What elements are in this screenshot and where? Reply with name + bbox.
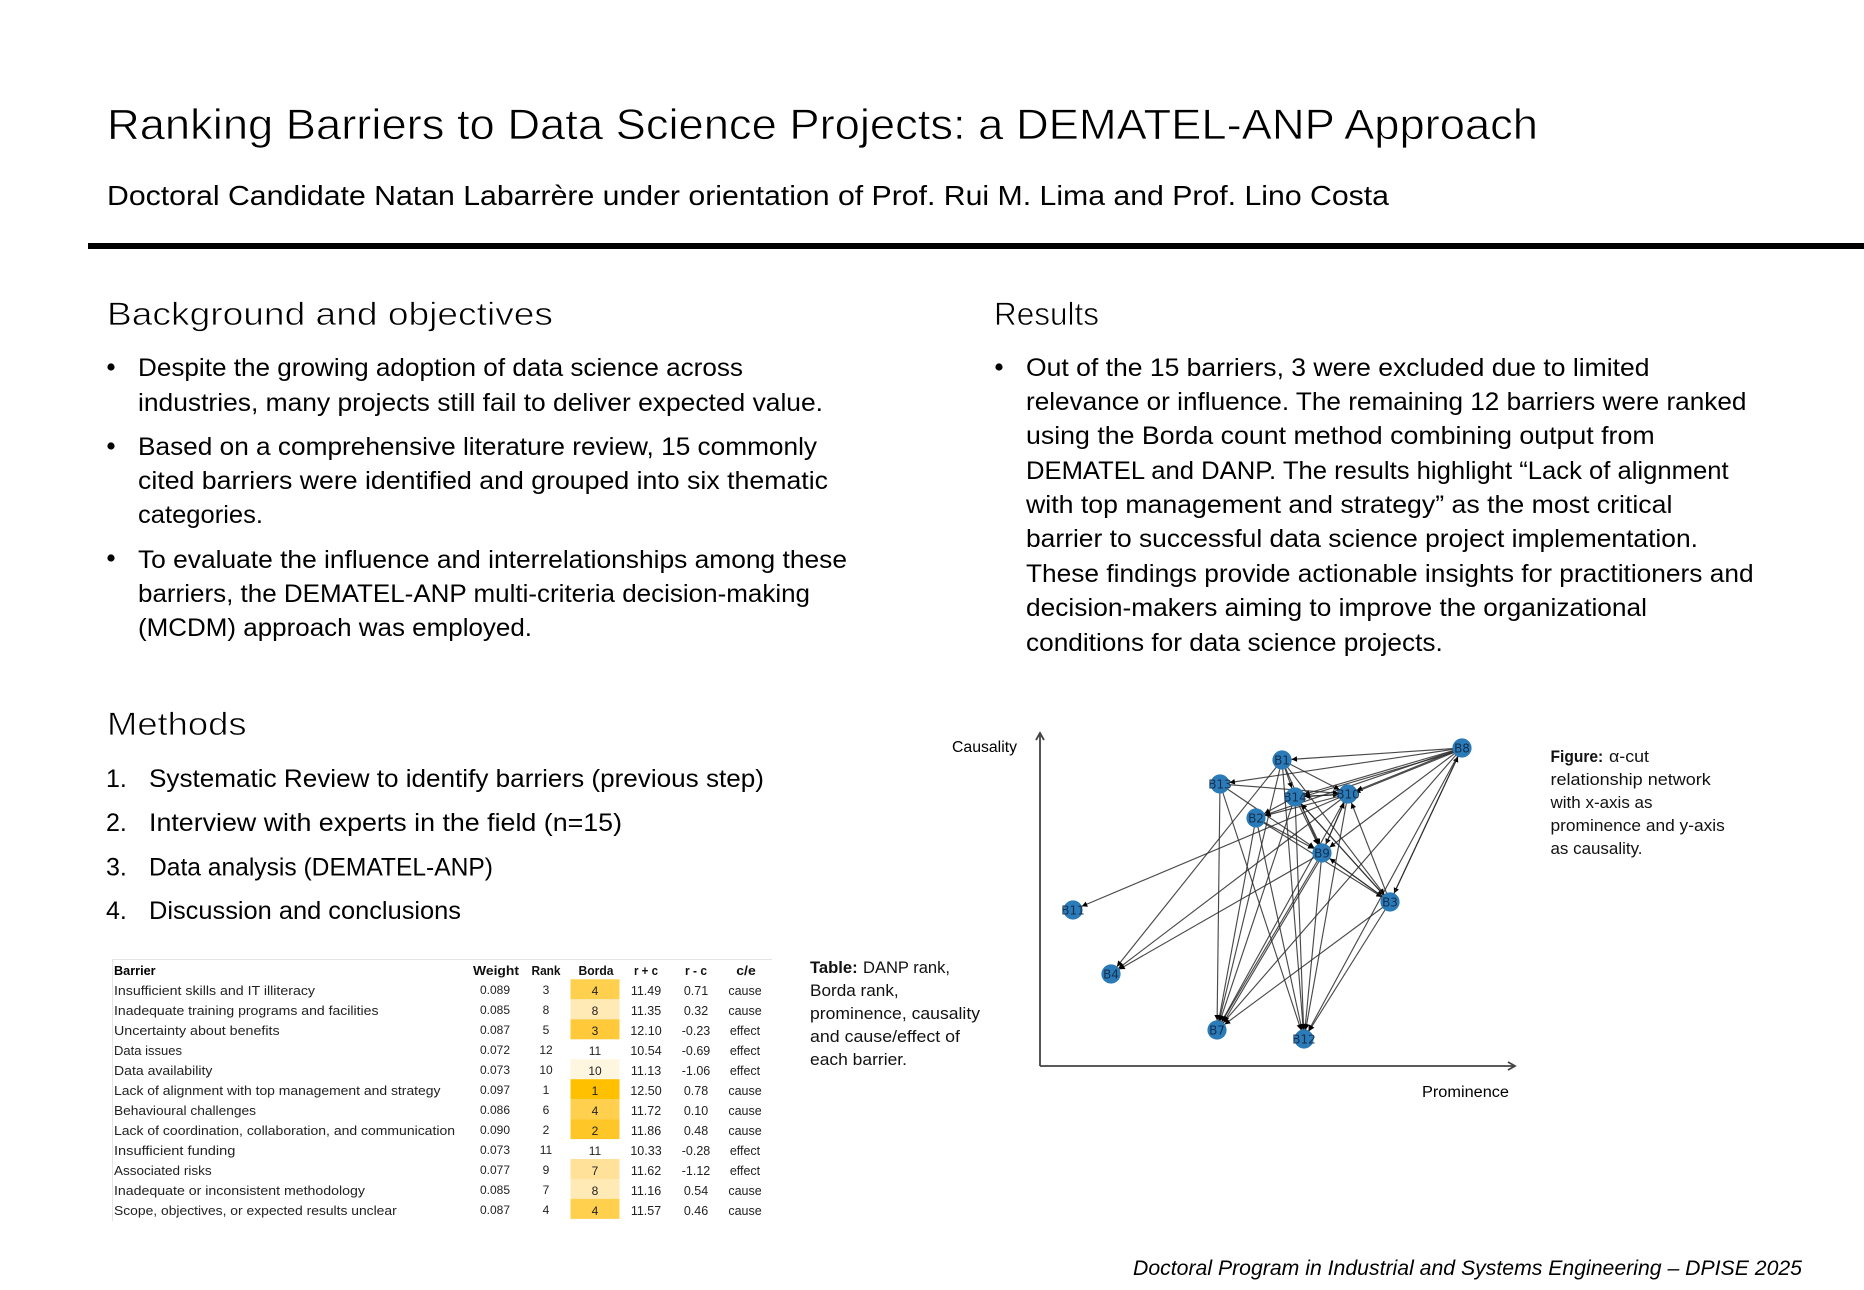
row 6: 1 xyxy=(592,1084,599,1098)
row 5: 10 xyxy=(539,1063,553,1077)
row 12: 4 xyxy=(543,1203,550,1217)
row 2: 0.32 xyxy=(684,1004,708,1018)
bullet text block 1: industries, many projects still fail to deliver expected value. xyxy=(138,389,823,417)
node B8 xyxy=(1452,738,1472,758)
figure caption: α-cut xyxy=(1609,747,1649,766)
panel: results xyxy=(994,296,1754,657)
row 11: cause xyxy=(728,1184,762,1198)
table: barrier ranking xyxy=(112,959,772,1221)
node B12: B12 xyxy=(1292,1032,1316,1046)
row 6: 0.78 xyxy=(684,1084,708,1098)
table: borda heat cells xyxy=(570,979,620,1219)
table header row xyxy=(114,964,756,978)
table header row: Rank xyxy=(532,964,561,978)
row 3: 12.10 xyxy=(630,1024,662,1038)
row 8 xyxy=(114,1123,762,1138)
bullet text block 3: (MCDM) approach was employed. xyxy=(138,614,532,642)
figure caption: Figure: xyxy=(1550,747,1603,766)
row 4: -0.69 xyxy=(682,1044,710,1058)
method step 1: 1. xyxy=(106,765,127,793)
node B2 xyxy=(1246,808,1266,828)
node B4 xyxy=(1101,964,1121,984)
row 9: 10.33 xyxy=(630,1144,662,1158)
row 11: 0.54 xyxy=(684,1184,708,1198)
row 7: cause xyxy=(728,1104,762,1118)
node B3 xyxy=(1380,892,1400,912)
row 10: effect xyxy=(730,1164,761,1178)
row 4: 11 xyxy=(589,1044,602,1058)
node B10: B10 xyxy=(1336,788,1360,802)
table caption: DANP rank, xyxy=(863,958,950,977)
row 1: cause xyxy=(728,984,762,998)
table header row: Weight xyxy=(473,964,520,978)
bullet text block 2: categories. xyxy=(138,501,263,529)
row 7: 0.10 xyxy=(684,1104,708,1118)
bullet text block 3 xyxy=(107,546,847,642)
row 2: 8 xyxy=(543,1003,550,1017)
row 6 xyxy=(114,1083,762,1098)
node B14: B14 xyxy=(1283,790,1307,804)
heading: background and objectives: Background and objectives xyxy=(107,296,553,332)
row 3: Uncertainty about benefits xyxy=(114,1024,280,1038)
results text block: DEMATEL and DANP. The results highlight “Lack of alignment xyxy=(1026,457,1729,485)
row 5: Data availability xyxy=(114,1064,213,1078)
method step 2: 2. xyxy=(106,809,127,837)
node B1: B1 xyxy=(1274,754,1290,768)
row 7 xyxy=(114,1103,762,1118)
row 10 xyxy=(114,1163,761,1178)
table caption: and cause/effect of xyxy=(810,1027,960,1046)
row 5: effect xyxy=(730,1064,761,1078)
node B4: B4 xyxy=(1103,968,1119,982)
bullet text block 2: Based on a comprehensive literature review, 15 commonly xyxy=(138,433,818,461)
row 8: cause xyxy=(728,1124,762,1138)
row 8: 11.86 xyxy=(631,1124,661,1138)
bullet text block 3: barriers, the DEMATEL-ANP multi-criteria decision-making xyxy=(138,580,810,608)
table header row: c/e xyxy=(736,964,756,978)
method step 3: Data analysis (DEMATEL-ANP) xyxy=(149,854,493,882)
header rule xyxy=(88,243,1864,249)
figure caption: prominence and y-axis xyxy=(1550,816,1725,835)
panel: background and objectives xyxy=(107,296,847,642)
node B9: B9 xyxy=(1314,846,1330,860)
figure caption xyxy=(1549,747,1725,858)
row 4: 12 xyxy=(539,1043,553,1057)
row 8: 2 xyxy=(592,1124,599,1138)
row 4: effect xyxy=(730,1044,761,1058)
row 7: 4 xyxy=(592,1104,599,1118)
network edges xyxy=(1073,748,1462,1039)
row 12: cause xyxy=(728,1204,762,1218)
row 8: 0.090 xyxy=(480,1123,510,1137)
node B2: B2 xyxy=(1248,812,1264,826)
row 11: 0.085 xyxy=(480,1183,510,1197)
row 1 xyxy=(114,983,762,998)
table caption xyxy=(810,958,981,1069)
row 12 xyxy=(114,1203,762,1218)
row 3: -0.23 xyxy=(682,1024,710,1038)
node B9 xyxy=(1312,843,1332,863)
row 2: 11.35 xyxy=(631,1004,661,1018)
method step 1: Systematic Review to identify barriers (previous step) xyxy=(149,765,764,793)
node B8: B8 xyxy=(1454,742,1470,756)
bullet text block 2: cited barriers were identified and grouped into six thematic xyxy=(138,467,828,495)
table caption: Table: xyxy=(810,958,858,977)
row 12: 4 xyxy=(592,1204,599,1218)
row 11: 8 xyxy=(592,1184,599,1198)
row 4: 0.072 xyxy=(480,1043,510,1057)
y axis with arrow xyxy=(1036,733,1044,1066)
bullet text block 1: Despite the growing adoption of data science across xyxy=(138,354,743,382)
row 2: 8 xyxy=(592,1004,599,1018)
results text block: Out of the 15 barriers, 3 were excluded due to limited xyxy=(1026,354,1650,382)
row 1: Insufficient skills and IT illiteracy xyxy=(114,984,316,998)
row 1: 4 xyxy=(592,984,599,998)
row 8: Lack of coordination, collaboration, and communication xyxy=(114,1124,455,1138)
subtitle: authors: Doctoral Candidate Natan Labarrère under orientation of Prof. Rui M. Lima and Prof. Lino Costa xyxy=(107,180,1389,211)
node B13: B13 xyxy=(1208,778,1232,792)
figure caption: relationship network xyxy=(1550,770,1712,789)
row 2: Inadequate training programs and facilities xyxy=(114,1004,378,1018)
row 7: 11.72 xyxy=(631,1104,661,1118)
row 5: 11.13 xyxy=(631,1064,661,1078)
row 12: 11.57 xyxy=(631,1204,661,1218)
row 4: 10.54 xyxy=(630,1044,662,1058)
table caption: each barrier. xyxy=(810,1050,907,1069)
row 2 xyxy=(114,1003,762,1018)
table header row: r + c xyxy=(634,964,658,978)
row 5: 10 xyxy=(588,1064,602,1078)
row 10: 0.077 xyxy=(480,1163,510,1177)
row 3: 3 xyxy=(592,1024,599,1038)
row 9: -0.28 xyxy=(682,1144,710,1158)
panel: methods xyxy=(106,706,764,925)
bullet text block 3: To evaluate the influence and interrelationships among these xyxy=(138,546,847,574)
row 3: 0.087 xyxy=(480,1023,510,1037)
results text block: These findings provide actionable insights for practitioners and xyxy=(1026,560,1754,588)
node B3: B3 xyxy=(1382,896,1398,910)
results text block: decision-makers aiming to improve the organizational xyxy=(1026,594,1647,622)
node B1 xyxy=(1272,750,1292,770)
row 11: 11.16 xyxy=(631,1184,661,1198)
row 9: effect xyxy=(730,1144,761,1158)
row 10: -1.12 xyxy=(682,1164,710,1178)
row 12: 0.46 xyxy=(684,1204,708,1218)
method step 2: Interview with experts in the field (n=15) xyxy=(149,809,622,837)
row 9: 11 xyxy=(589,1144,602,1158)
row 9: 11 xyxy=(540,1143,553,1157)
row 11: Inadequate or inconsistent methodology xyxy=(114,1184,366,1198)
results text block: conditions for data science projects. xyxy=(1026,629,1443,657)
row 3: effect xyxy=(730,1024,761,1038)
method step 4: Discussion and conclusions xyxy=(149,897,461,925)
row 7: 6 xyxy=(543,1103,550,1117)
bullet text block 2 xyxy=(107,433,828,529)
y axis label: Causality xyxy=(952,739,1017,756)
table caption: prominence, causality xyxy=(810,1004,981,1023)
row 6: cause xyxy=(728,1084,762,1098)
results text block: with top management and strategy” as the most critical xyxy=(1025,491,1672,519)
method step 3: 3. xyxy=(106,854,127,882)
row 4 xyxy=(114,1043,761,1058)
row 3: 5 xyxy=(543,1023,550,1037)
row 10: 11.62 xyxy=(631,1164,661,1178)
row 5 xyxy=(114,1063,761,1078)
row 1: 0.71 xyxy=(684,984,708,998)
table header row: Borda xyxy=(578,964,614,978)
row 7: Behavioural challenges xyxy=(114,1104,256,1118)
results text block xyxy=(995,354,1754,657)
row 6: 1 xyxy=(543,1083,550,1097)
chart: relationship network xyxy=(952,733,1515,1101)
row 2: cause xyxy=(728,1004,762,1018)
row 8: 2 xyxy=(543,1123,550,1137)
results text block: relevance or influence. The remaining 12 barriers were ranked xyxy=(1026,388,1746,416)
row 7: 0.086 xyxy=(480,1103,510,1117)
row 8: 0.48 xyxy=(684,1124,708,1138)
row 1: 0.089 xyxy=(480,983,510,997)
title: Ranking Barriers to Data Science Projects: a DEMATEL-ANP Approach xyxy=(107,101,1538,149)
row 1: 11.49 xyxy=(631,984,661,998)
heading: results: Results xyxy=(994,296,1099,332)
row 11: 7 xyxy=(543,1183,550,1197)
results text block: using the Borda count method combining output from xyxy=(1026,422,1655,450)
row 10: 7 xyxy=(592,1164,599,1178)
figure caption: with x-axis as xyxy=(1549,793,1652,812)
footer: Doctoral Program in Industrial and Systems Engineering – DPISE 2025 xyxy=(1133,1256,1803,1280)
row 11 xyxy=(114,1183,762,1198)
row 5: 0.073 xyxy=(480,1063,510,1077)
node B11: B11 xyxy=(1061,904,1085,918)
row 10: 9 xyxy=(543,1163,550,1177)
row 6: 0.097 xyxy=(480,1083,510,1097)
row 5: -1.06 xyxy=(682,1064,710,1078)
method step 4: 4. xyxy=(106,897,127,925)
row 2: 0.085 xyxy=(480,1003,510,1017)
table header row: r - c xyxy=(685,964,707,978)
node B7 xyxy=(1207,1020,1227,1040)
table caption: Borda rank, xyxy=(810,981,899,1000)
row 9: Insufficient funding xyxy=(114,1144,235,1158)
row 9 xyxy=(114,1143,761,1158)
row 6: Lack of alignment with top management and strategy xyxy=(114,1084,441,1098)
row 10: Associated risks xyxy=(114,1164,212,1178)
row 3 xyxy=(114,1023,761,1038)
row 9: 0.073 xyxy=(480,1143,510,1157)
row 1: 3 xyxy=(543,983,550,997)
row 4: Data issues xyxy=(114,1044,182,1058)
node B7: B7 xyxy=(1209,1024,1225,1038)
x axis label: Prominence xyxy=(1422,1084,1509,1101)
row 6: 12.50 xyxy=(630,1084,662,1098)
bullet text block 1 xyxy=(107,354,823,417)
results text block: barrier to successful data science project implementation. xyxy=(1026,525,1698,553)
x axis with arrow xyxy=(1040,1062,1515,1070)
table header row: Barrier xyxy=(114,964,156,978)
figure caption: as causality. xyxy=(1550,839,1642,858)
row 12: Scope, objectives, or expected results unclear xyxy=(114,1204,397,1218)
heading: methods: Methods xyxy=(107,706,247,742)
row 12: 0.087 xyxy=(480,1203,510,1217)
